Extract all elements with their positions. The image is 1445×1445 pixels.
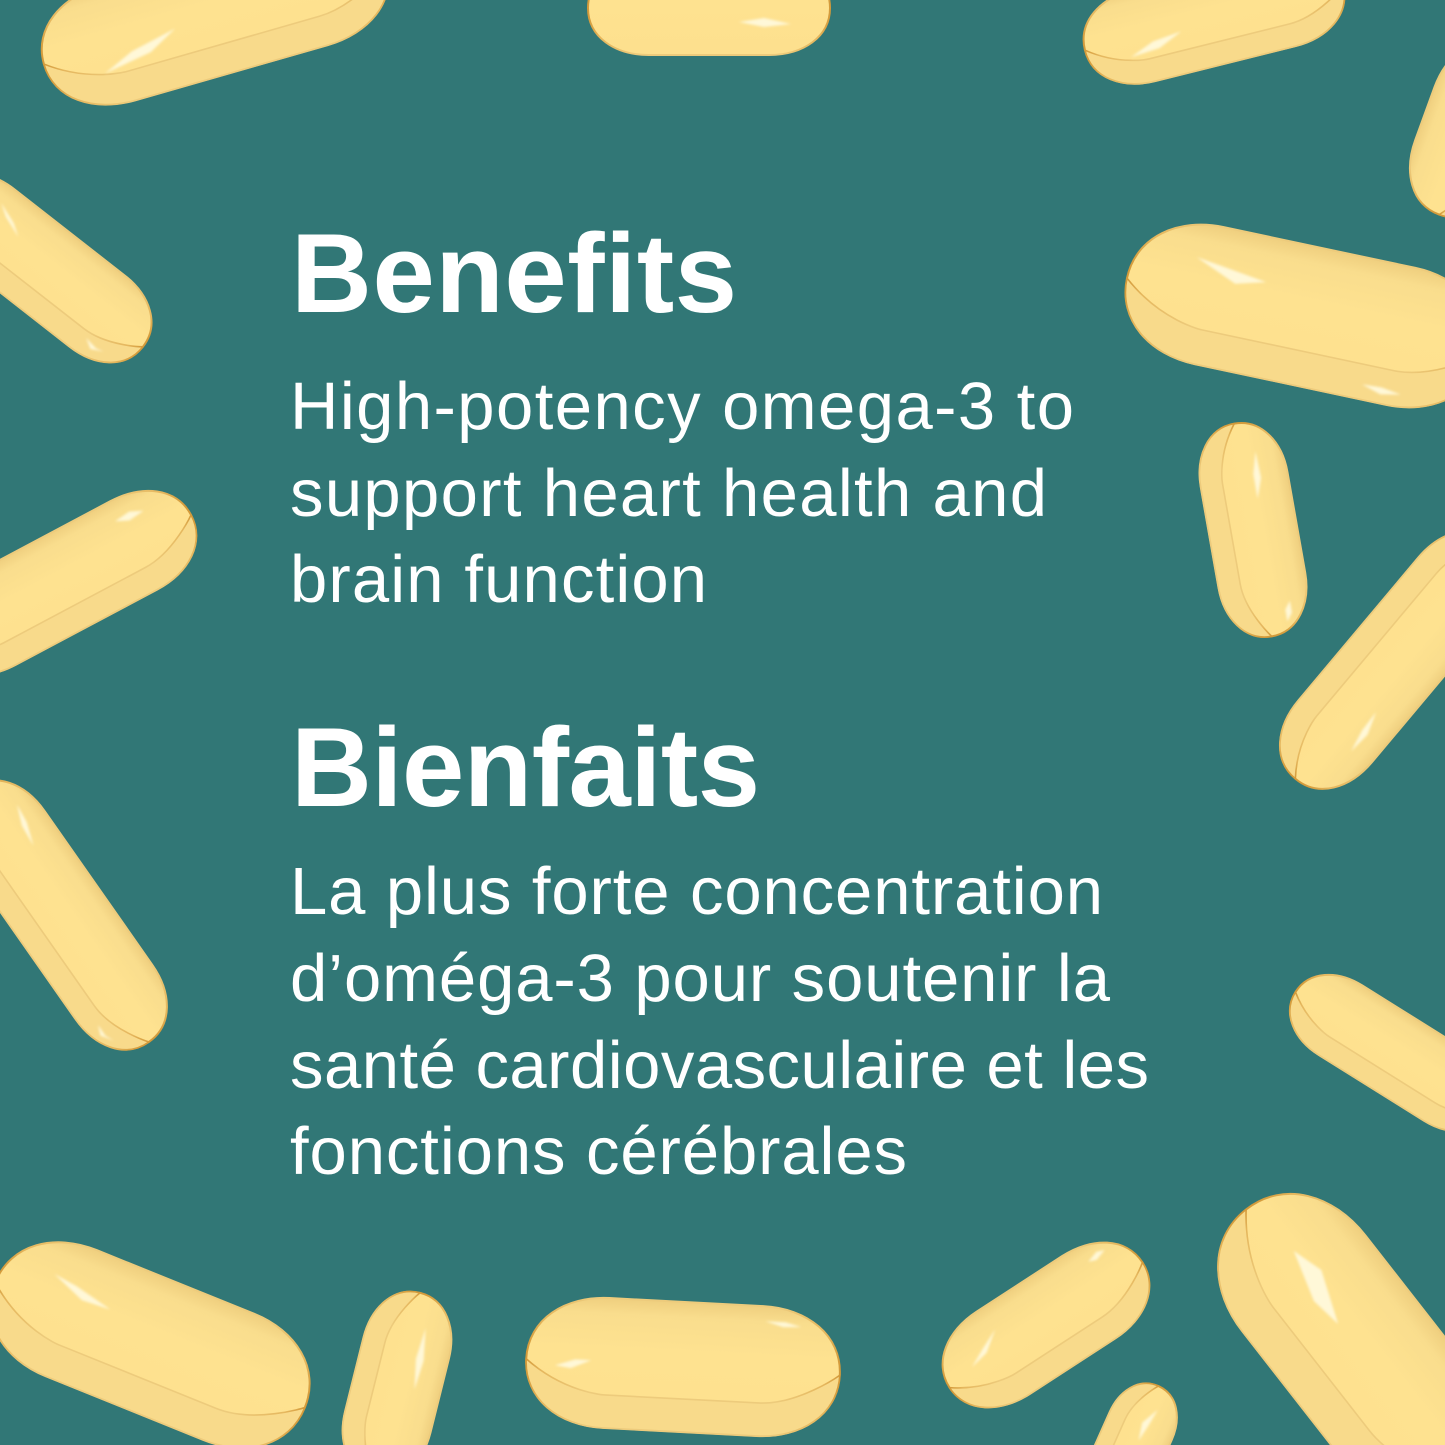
capsule: top right — [1074, 0, 1354, 96]
text block: French benefits: d’oméga-3 pour soutenir la — [290, 941, 1111, 1016]
text block: English benefits: High-potency omega-3 to — [290, 369, 1074, 444]
capsule: right middle — [1259, 510, 1445, 810]
text block: English benefits: brain function — [290, 542, 707, 617]
capsule: right lower — [1274, 957, 1445, 1149]
text block: French benefits: La plus forte concentration — [290, 854, 1103, 929]
text block: French benefits: fonctions cérébrales — [290, 1114, 907, 1189]
capsule: top left — [27, 0, 403, 122]
capsule: bottom right large — [1185, 1161, 1445, 1445]
capsule: top center — [588, 0, 830, 55]
text block: French benefits: santé cardiovasculaire et les — [290, 1028, 1149, 1103]
capsule: left lower — [0, 761, 187, 1069]
capsule: bottom center — [523, 1294, 843, 1440]
text block: English benefits — [290, 369, 1074, 617]
capsule: right large — [1112, 210, 1445, 422]
text block: English benefits: support heart health and — [290, 456, 1047, 531]
capsule: bottom right small — [923, 1221, 1169, 1429]
capsule: bottom second — [331, 1282, 463, 1445]
text block: French benefits — [290, 854, 1149, 1189]
capsule: right edge top — [1394, 29, 1445, 231]
capsule: bottom tiny — [1070, 1372, 1190, 1445]
capsule: bottom left — [0, 1219, 330, 1445]
capsule: left upper — [0, 154, 171, 382]
capsule: left middle — [0, 471, 215, 695]
heading: Bienfaits: Bienfaits — [291, 705, 760, 830]
heading: Benefits: Benefits — [291, 211, 737, 336]
capsule: right small vertical — [1191, 416, 1315, 644]
